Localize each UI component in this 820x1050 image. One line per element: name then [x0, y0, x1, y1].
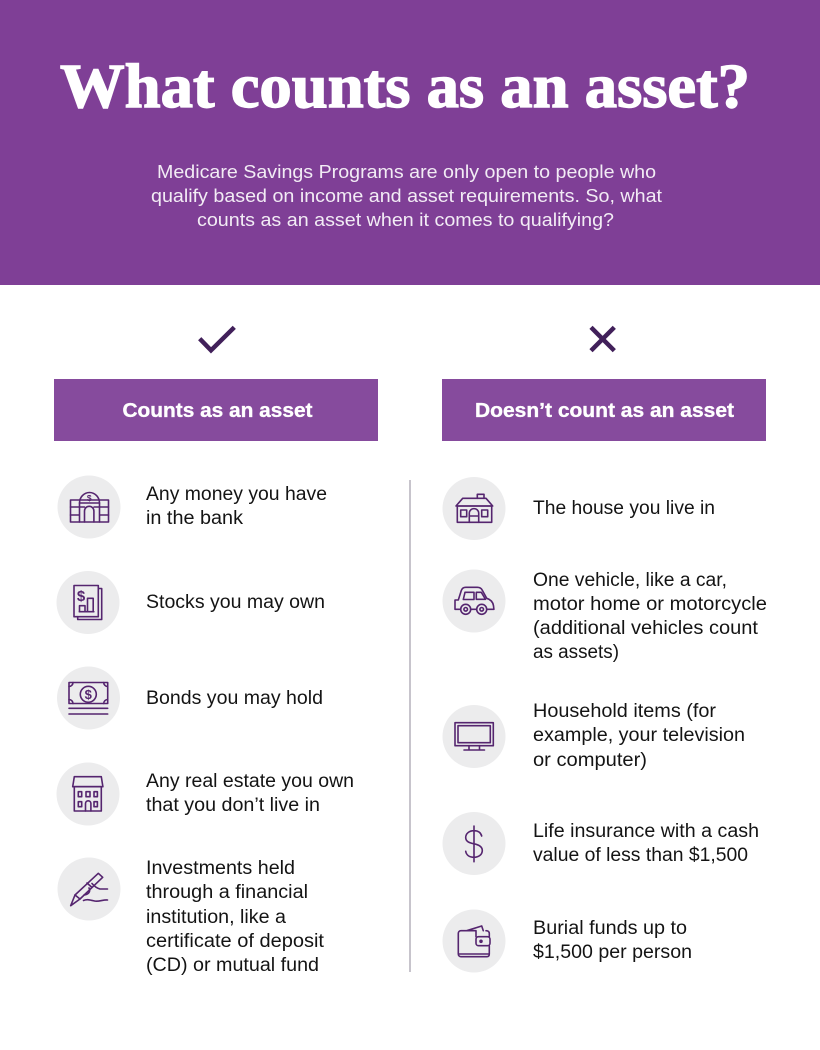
- text: Burial funds up to: [533, 918, 687, 939]
- text: (additional vehicles count: [533, 618, 759, 639]
- item: stocks: [56, 571, 325, 634]
- text: certificate of deposit: [146, 931, 325, 952]
- intro paragraph: qualify based on income and asset requirements. So, what: [151, 185, 662, 206]
- text: Stocks you may own: [146, 592, 325, 613]
- intro paragraph: Medicare Savings Programs are only open to people who: [157, 161, 656, 182]
- text: [533, 821, 759, 866]
- column header: counts as an asset: Counts as an asset: [122, 400, 313, 422]
- icon: cross mark: [591, 327, 614, 351]
- icon: hand with pen: [58, 858, 120, 920]
- text: that you don’t live in: [146, 795, 320, 816]
- intro paragraph: counts as an asset when it comes to qualifying?: [197, 209, 614, 230]
- text: in the bank: [146, 508, 244, 529]
- icon: bank: [58, 476, 120, 538]
- text: Any real estate you own: [146, 771, 354, 792]
- text: Investments held: [146, 858, 295, 879]
- icon: stock report: $: [77, 588, 86, 605]
- text: motor home or motorcycle: [533, 594, 767, 615]
- item: burial funds: [442, 910, 692, 972]
- icon: car: [442, 570, 506, 632]
- text: (CD) or mutual fund: [146, 955, 319, 976]
- item: vehicle: [442, 570, 767, 663]
- text: [146, 771, 354, 816]
- icon: banknotes: $: [85, 687, 93, 702]
- icon: dollar sign: [442, 812, 506, 875]
- item: bonds: [57, 666, 323, 730]
- text: as assets): [533, 642, 619, 663]
- text: [533, 918, 692, 963]
- text: value of less than $1,500: [533, 845, 748, 866]
- text: $1,500 per person: [533, 942, 692, 963]
- text: or computer): [533, 750, 647, 771]
- text: institution, like a: [146, 907, 286, 928]
- column header: does not count as an asset: [442, 379, 766, 441]
- icon: stock report: [56, 571, 120, 634]
- text: [146, 858, 325, 976]
- header banner: [0, 0, 820, 285]
- item: household items: [442, 701, 745, 771]
- icon: house: [442, 477, 506, 540]
- column header: does not count as an asset: Doesn’t count as an asset: [475, 400, 734, 422]
- icon: bank: $: [87, 493, 92, 503]
- text: example, your television: [533, 725, 745, 746]
- text: [146, 484, 327, 529]
- icon: banknotes: [57, 666, 120, 730]
- text: One vehicle, like a car,: [533, 570, 727, 591]
- icon: apartment building: [56, 762, 120, 826]
- icon: television: [442, 705, 506, 768]
- text: Bonds you may hold: [146, 688, 323, 709]
- item: real estate: [56, 762, 354, 826]
- text: [533, 570, 767, 663]
- text: Life insurance with a cash: [533, 821, 759, 842]
- icon: check mark: [200, 327, 234, 350]
- icon: wallet: [442, 910, 506, 972]
- text: The house you live in: [533, 498, 715, 519]
- item: house: [442, 477, 715, 540]
- column header: counts as an asset: [54, 379, 378, 441]
- text: through a financial: [146, 882, 308, 903]
- text: Household items (for: [533, 701, 717, 722]
- item: investments: [58, 858, 325, 976]
- title: What counts as an asset?: [60, 53, 750, 121]
- item: life insurance: [442, 812, 759, 875]
- text: [533, 701, 745, 771]
- intro paragraph: [151, 161, 662, 230]
- text: Any money you have: [146, 484, 327, 505]
- item: money in the bank: [58, 476, 327, 538]
